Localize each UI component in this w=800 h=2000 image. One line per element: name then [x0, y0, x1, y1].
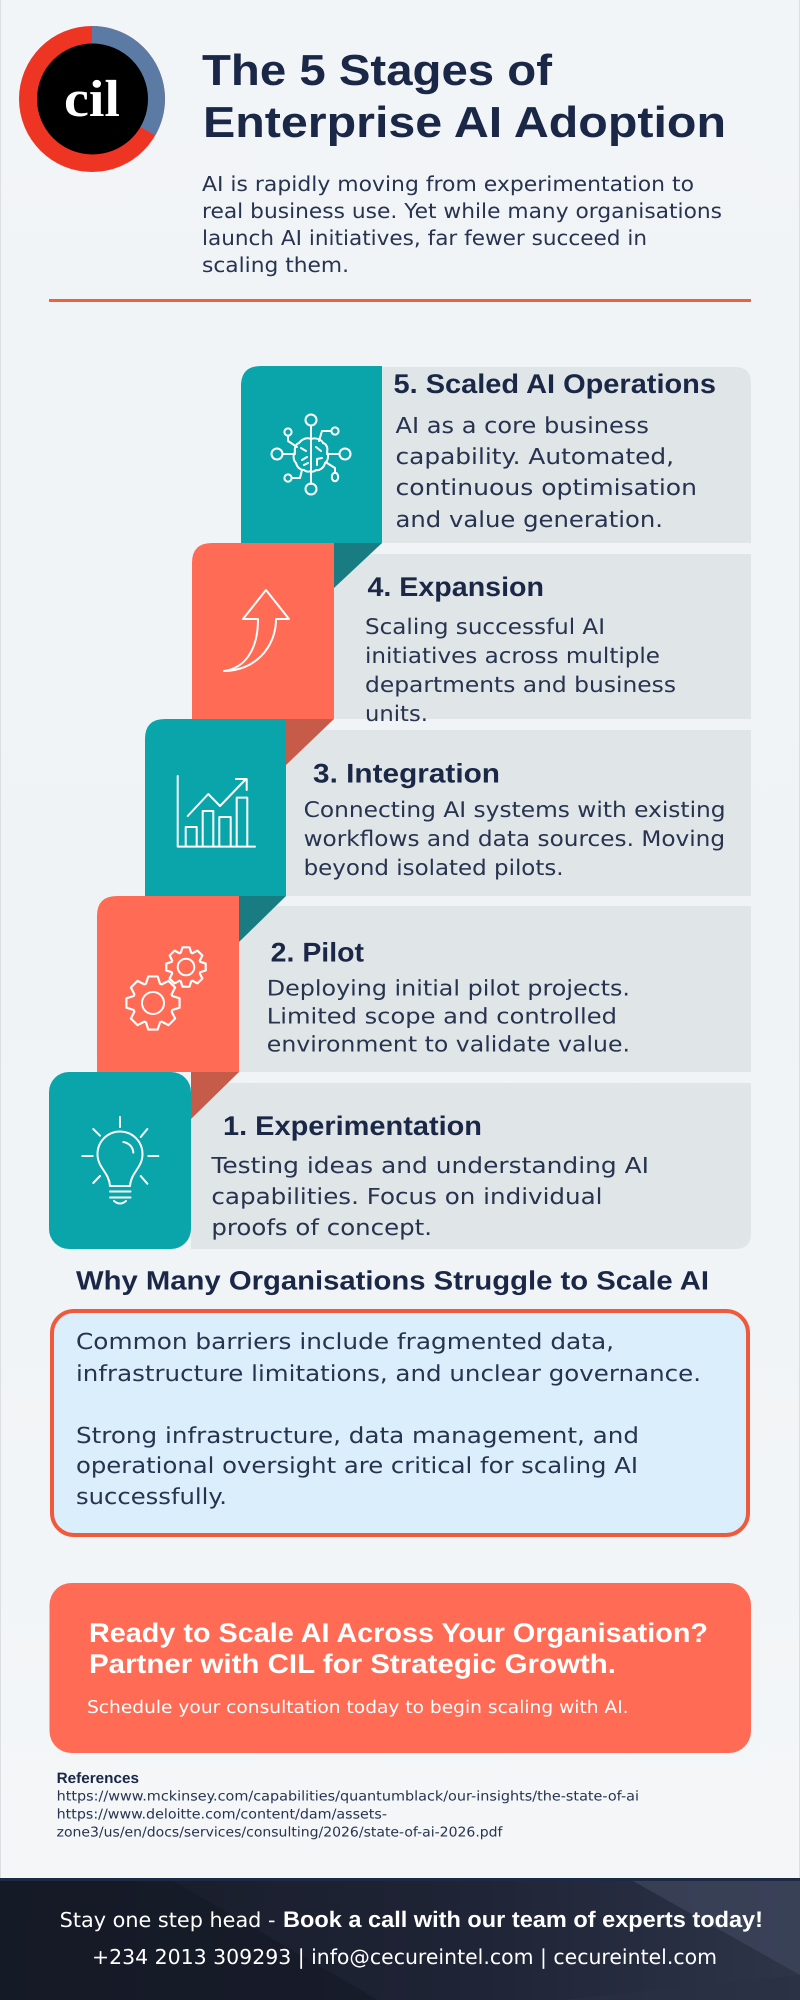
footer: [0, 1878, 800, 2000]
logo: cil: [64, 71, 120, 128]
panel: barriers callout: Common barriers include fragmented data,: [76, 1330, 614, 1355]
staircase of stages: [49, 366, 751, 1249]
panel: call to action: [50, 1583, 751, 1753]
stage 3 text: [304, 759, 726, 881]
icon: bar chart: [178, 776, 255, 847]
block: stage 2: [97, 896, 239, 1072]
stage 3 text: workflows and data sources. Moving: [304, 827, 725, 852]
references: https://www.mckinsey.com/capabilities/quantumblack/our-insights/the-state-of-ai: [57, 1789, 639, 1805]
fold: stage 5: [334, 543, 382, 588]
stage 5 text: 5. Scaled AI Operations: [394, 369, 716, 399]
stage 5 text: AI as a core business: [396, 414, 649, 439]
panel: call to action: Partner with CIL for Strategic Growth.: [89, 1649, 616, 1679]
stage 1 text: 1. Experimentation: [223, 1111, 482, 1141]
panel: stage 1: [191, 1083, 751, 1249]
stage 2 text: Deploying initial pilot projects.: [267, 977, 630, 1002]
panel: call to action: Ready to Scale AI Across Your Organisation?: [89, 1618, 708, 1648]
references: [57, 1770, 639, 1841]
stage 2 text: 2. Pilot: [271, 938, 364, 968]
intro text: launch AI initiatives, far fewer succeed in: [202, 226, 647, 250]
references: zone3/us/en/docs/services/consulting/2026/state-of-ai-2026.pdf: [57, 1825, 504, 1841]
stage 1 text: [210, 1111, 649, 1241]
intro text: scaling them.: [202, 253, 349, 277]
references: References: [57, 1770, 139, 1787]
title: Enterprise AI Adoption: [203, 99, 726, 147]
fold: stage 2: [191, 1072, 239, 1119]
panel: barriers callout: Strong infrastructure, data management, and: [76, 1424, 639, 1449]
stage 3 text: Connecting AI systems with existing: [304, 798, 726, 823]
stage 2 text: Limited scope and controlled: [267, 1005, 617, 1030]
intro text: [202, 172, 722, 277]
panel: barriers callout: infrastructure limitations, and unclear governance.: [76, 1362, 701, 1387]
heading: why organisations struggle: Why Many Organisations Struggle to Scale AI: [76, 1265, 709, 1295]
intro text: AI is rapidly moving from experimentation to: [202, 172, 694, 196]
stage 5 text: and value generation.: [396, 508, 663, 533]
title: [202, 47, 726, 147]
stage 4 text: 4. Expansion: [368, 572, 544, 602]
intro text: real business use. Yet while many organisations: [202, 199, 722, 223]
panel: barriers callout: operational oversight are critical for scaling AI: [76, 1454, 638, 1479]
panel: stage 3: [286, 730, 751, 896]
stage 4 text: departments and business: [365, 673, 676, 698]
stage 1 text: capabilities. Focus on individual: [211, 1185, 602, 1210]
stage 1 text: proofs of concept.: [211, 1216, 432, 1241]
icon: growth arrow: [224, 590, 289, 671]
stage 4 text: Scaling successful AI: [365, 615, 605, 640]
panel: barriers callout: successfully.: [76, 1485, 227, 1510]
block: stage 4: [192, 543, 334, 719]
footer: Stay one step head -: [60, 1908, 276, 1932]
logo: [19, 26, 165, 172]
stage 4 text: initiatives across multiple: [365, 644, 660, 669]
stage 4 text: units.: [365, 702, 428, 727]
title: The 5 Stages of: [202, 47, 553, 95]
footer: Book a call with our team of experts today!: [283, 1907, 763, 1932]
header: [19, 26, 726, 277]
stage 5 text: [394, 369, 716, 533]
stage 5 text: capability. Automated,: [396, 445, 674, 470]
icon: neural brain: [272, 414, 350, 494]
fold: stage 3: [239, 896, 286, 942]
panel: call to action: Schedule your consultation today to begin scaling with AI.: [87, 1698, 629, 1718]
panel: stage 2: [239, 906, 751, 1072]
stage 5 text: continuous optimisation: [396, 476, 697, 501]
panel: stage 4: [334, 554, 751, 719]
stage 2 text: [267, 938, 630, 1058]
stage 4 text: [365, 572, 676, 727]
footer: +234 2013 309293 | info@cecureintel.com | cecureintel.com: [92, 1945, 717, 1969]
fold: stage 4: [286, 719, 334, 765]
block: stage 3: [145, 719, 286, 896]
panel: barriers callout: [52, 1311, 748, 1535]
icon: gears: [126, 947, 206, 1030]
stage 3 text: beyond isolated pilots.: [304, 856, 564, 881]
icon: lightbulb: [82, 1117, 158, 1204]
panel: stage 5: [382, 367, 751, 543]
block: stage 1: [49, 1072, 191, 1249]
stage 2 text: environment to validate value.: [267, 1033, 630, 1058]
stage 3 text: 3. Integration: [313, 759, 500, 789]
references: https://www.deloitte.com/content/dam/assets-: [57, 1807, 387, 1823]
block: stage 5: [241, 366, 382, 543]
stage 1 text: Testing ideas and understanding AI: [210, 1154, 649, 1179]
